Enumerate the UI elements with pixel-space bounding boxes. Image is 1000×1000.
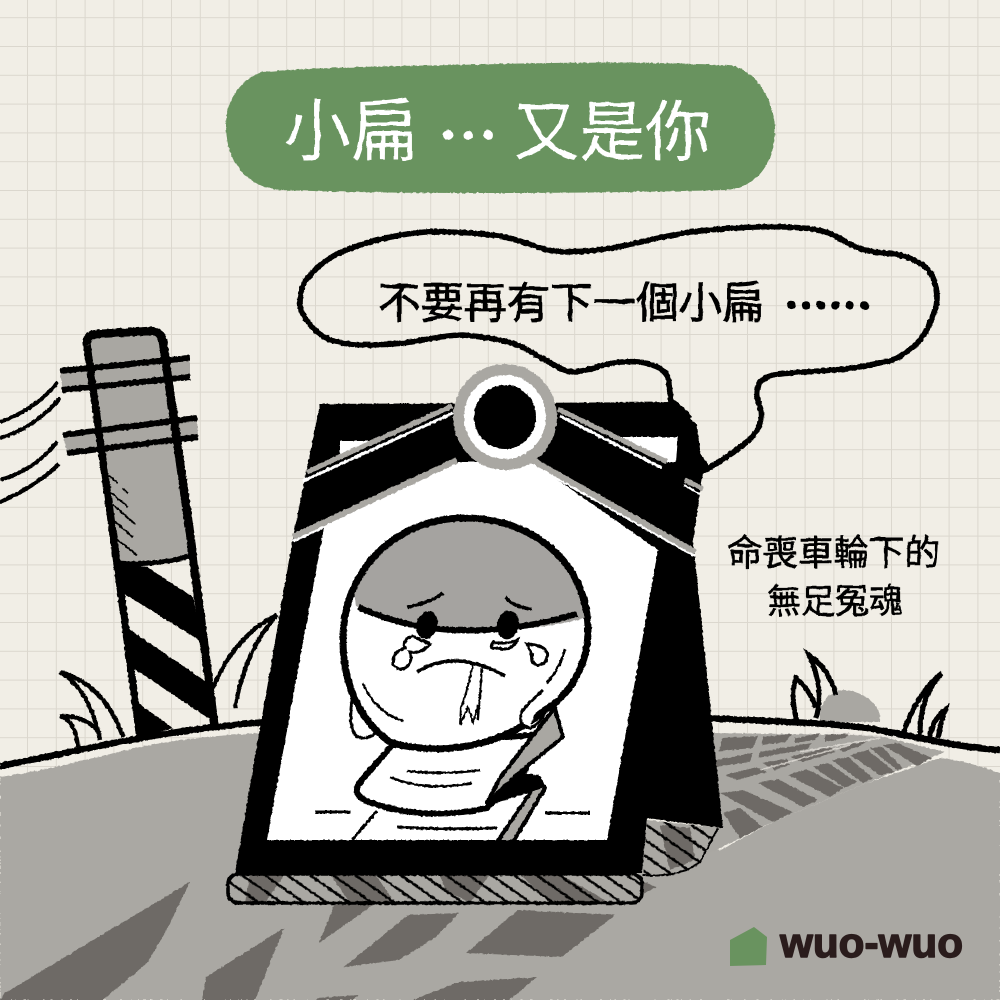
portrait white panel bbox=[267, 462, 658, 840]
speech bubble text: …… bbox=[784, 271, 872, 335]
speech bubble text: 不要再有下一個小扁 bbox=[378, 280, 765, 328]
head bbox=[340, 500, 600, 749]
caption: 無足冤魂 bbox=[767, 583, 903, 621]
tire tracks on the road, right bbox=[700, 732, 945, 858]
cheek lines bbox=[363, 649, 565, 721]
icon: house bbox=[730, 927, 767, 966]
bush bbox=[820, 690, 880, 722]
title text: 小扁 bbox=[283, 94, 419, 170]
cross bars bbox=[60, 358, 198, 453]
base bottom bbox=[228, 874, 642, 903]
pole outline bbox=[87, 331, 215, 730]
collar fold lines bbox=[390, 770, 480, 786]
black warning stripes bbox=[117, 563, 214, 738]
drool bbox=[460, 663, 482, 725]
mouth bbox=[417, 661, 505, 676]
utility pole bbox=[60, 331, 215, 738]
bubble outline bbox=[300, 227, 937, 490]
roof medallion bbox=[453, 364, 557, 470]
logo bbox=[730, 919, 963, 966]
hatched base of frame bbox=[228, 820, 718, 903]
grass blades bbox=[793, 655, 945, 738]
mask top line bbox=[358, 607, 577, 630]
eave end stripe bbox=[685, 480, 703, 489]
title text: 又是你 bbox=[513, 95, 711, 169]
lower strap bbox=[497, 776, 545, 842]
memorial portrait frame bbox=[235, 364, 723, 873]
eyebrows bbox=[407, 593, 532, 609]
base right side bbox=[643, 820, 718, 875]
grass and bush right bbox=[793, 655, 945, 738]
right side drip over head bbox=[521, 690, 543, 728]
back windows bbox=[340, 437, 678, 462]
speech bubble bbox=[300, 227, 937, 494]
title text: … bbox=[438, 89, 498, 176]
collar bbox=[357, 735, 535, 813]
ground line bbox=[0, 718, 1000, 766]
head grey top bbox=[354, 521, 585, 629]
pole lower edge of grey bbox=[117, 556, 190, 564]
ground bbox=[0, 733, 1000, 1000]
pole left outline bbox=[87, 345, 140, 738]
caption: 命喪車輪下的 bbox=[727, 533, 940, 573]
title pill bbox=[226, 63, 775, 193]
grass left bbox=[60, 615, 277, 747]
frame back and outer black bbox=[235, 402, 723, 873]
wires bbox=[0, 382, 60, 502]
hatching on pole bbox=[108, 475, 137, 555]
speech bubble text bbox=[378, 271, 872, 335]
grey strap bbox=[487, 708, 563, 803]
lower body lines bbox=[315, 811, 590, 840]
title text bbox=[283, 89, 711, 176]
tears bbox=[393, 636, 547, 669]
roof lines bbox=[293, 406, 695, 556]
eyes bbox=[413, 609, 522, 641]
pole body bbox=[88, 333, 190, 563]
logo wordmark: wuo-wuo bbox=[779, 919, 963, 966]
side drips bbox=[351, 688, 548, 738]
caption bbox=[727, 533, 940, 621]
black strap wedge bbox=[487, 772, 546, 806]
tire tracks on the road, bottom bbox=[0, 880, 656, 1000]
bubble tail fill bbox=[654, 447, 711, 490]
